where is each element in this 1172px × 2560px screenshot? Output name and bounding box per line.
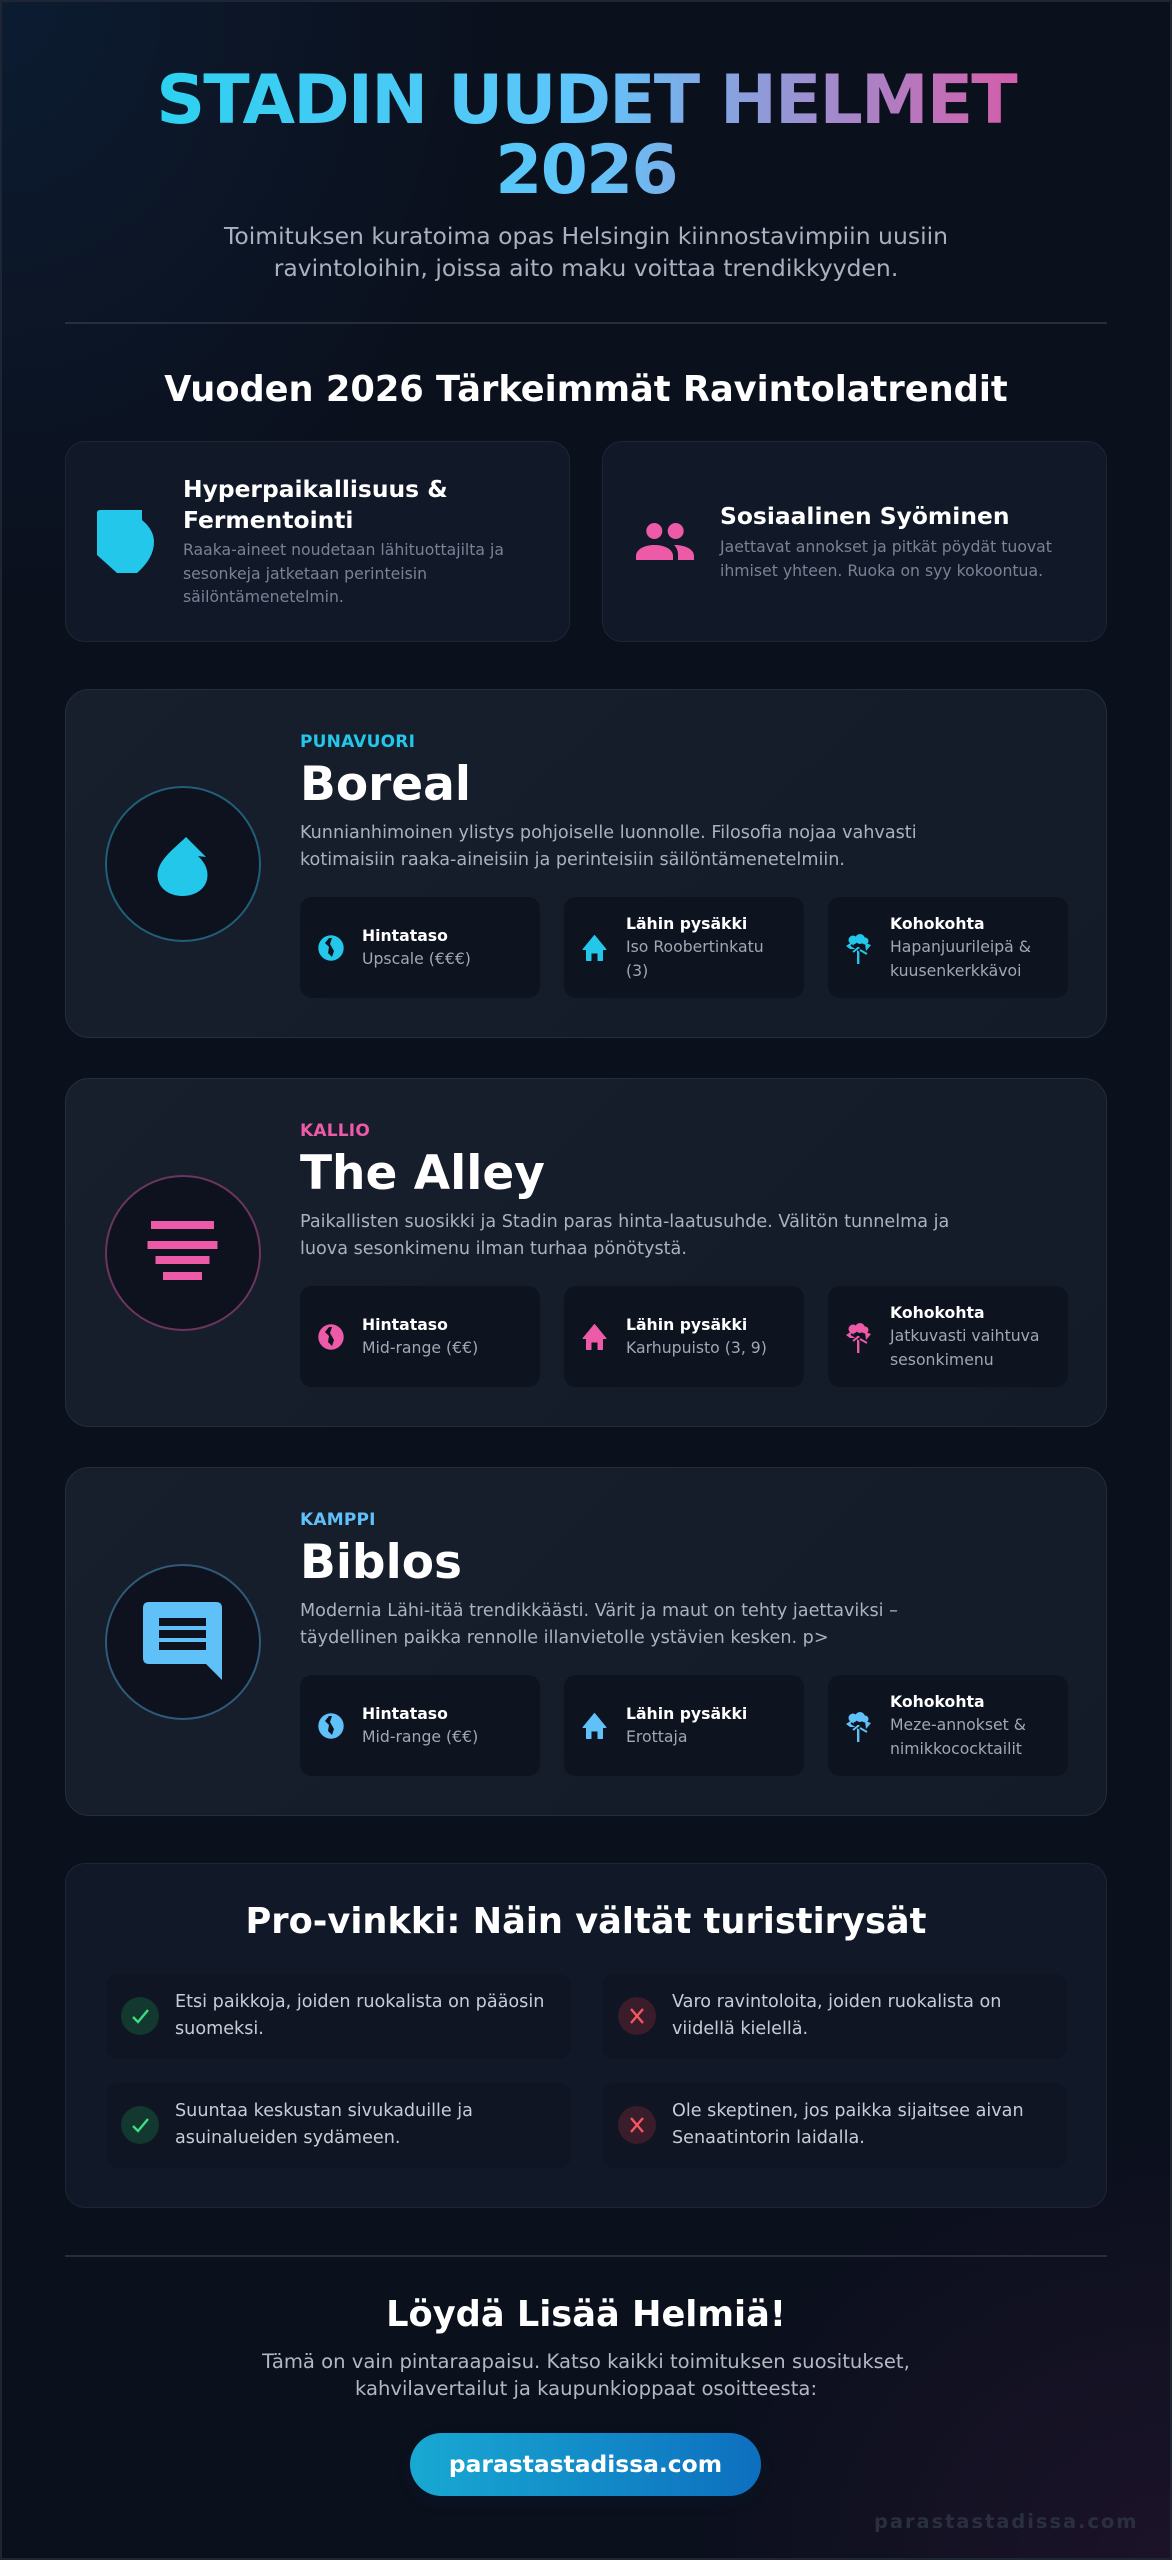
detail text: Jatkuvasti vaihtuva — [890, 1326, 1040, 1345]
icon: cross — [618, 1997, 656, 2035]
detail: highlight — [828, 897, 1068, 998]
footer heading: Löydä Lisää Helmiä! — [386, 2294, 786, 2335]
detail text — [626, 914, 764, 980]
detail text: Mid-range (€€) — [362, 1338, 478, 1357]
detail: price — [300, 897, 540, 998]
detail text — [626, 1704, 747, 1746]
trend description: sesonkeja jatketaan perinteisin — [183, 564, 427, 583]
restaurant description: Paikallisten suosikki ja Stadin paras hinta-laatusuhde. Välitön tunnelma ja — [300, 1212, 949, 1232]
icon: bars in ring — [105, 1175, 261, 1331]
tip text — [672, 1992, 1001, 2039]
panel: restaurant Biblos — [65, 1467, 1107, 1816]
restaurant description: kotimaisiin raaka-aineisiin ja perinteisiin säilöntämenetelmiin. — [300, 850, 845, 870]
subtitle: ravintoloihin, joissa aito maku voittaa trendikkyyden. — [274, 254, 898, 282]
detail: stop — [564, 1286, 804, 1387]
tip text: Etsi paikkoja, joiden ruokalista on pääosin — [175, 1992, 544, 2012]
icon: cross — [618, 2106, 656, 2144]
district label: KALLIO — [300, 1121, 370, 1141]
footer text — [262, 2350, 910, 2400]
restaurant description: luova sesonkimenu ilman turhaa pönötystä. — [300, 1239, 687, 1259]
trend title — [183, 475, 448, 534]
icon: price — [318, 1713, 344, 1739]
detail text: Lähin pysäkki — [626, 914, 747, 933]
title — [65, 66, 1107, 207]
panel: trend hyperlocal — [65, 441, 570, 642]
icon: tree — [846, 1712, 871, 1742]
watermark: parastastadissa.com — [874, 2510, 1138, 2533]
detail: highlight — [828, 1675, 1068, 1776]
section heading: trends: Vuoden 2026 Tärkeimmät Ravintolatrendit — [164, 369, 1008, 410]
detail text: Mid-range (€€) — [362, 1727, 478, 1746]
icon: house — [582, 935, 606, 961]
trend description: Raaka-aineet noudetaan lähituottajilta ja — [183, 540, 504, 559]
icon: check — [121, 2106, 159, 2144]
tip text: asuinalueiden sydämeen. — [175, 2128, 400, 2148]
restaurant description: Modernia Lähi-itää trendikkäästi. Värit ja maut on tehty jaettaviksi – — [300, 1601, 898, 1621]
tips heading: Pro-vinkki: Näin vältät turistirysät — [245, 1901, 926, 1942]
detail text: nimikkococktailit — [890, 1739, 1022, 1758]
tip text: Suuntaa keskustan sivukaduille ja — [175, 2101, 473, 2121]
panel: restaurant The Alley — [65, 1078, 1107, 1427]
icon: drop in ring — [105, 786, 261, 942]
trend title: Hyperpaikallisuus & — [183, 475, 448, 503]
call to action button — [410, 2433, 761, 2496]
detail text: Hintataso — [362, 1704, 448, 1723]
tip: do 1 — [106, 1974, 571, 2059]
title: 2026 — [495, 131, 677, 210]
detail text — [362, 926, 471, 968]
tip: do 2 — [106, 2083, 571, 2168]
tip text: Senaatintorin laidalla. — [672, 2128, 865, 2148]
detail: highlight — [828, 1286, 1068, 1387]
detail text: Erottaja — [626, 1727, 687, 1746]
detail text — [626, 1315, 767, 1357]
detail text: sesonkimenu — [890, 1350, 994, 1369]
restaurant name: Biblos — [300, 1534, 462, 1590]
icon: house — [582, 1324, 606, 1350]
detail text: Kohokohta — [890, 1303, 985, 1322]
tip text: Ole skeptinen, jos paikka sijaitsee aivan — [672, 2101, 1024, 2121]
detail text: Iso Roobertinkatu — [626, 937, 764, 956]
tip text — [175, 2101, 473, 2148]
tip: avoid 2 — [602, 2083, 1067, 2168]
icon: tree — [846, 934, 871, 964]
detail text: Lähin pysäkki — [626, 1315, 747, 1334]
icon: check — [121, 1997, 159, 2035]
detail text: (3) — [626, 961, 648, 980]
detail text: Hapanjuurileipä & — [890, 937, 1031, 956]
icon: house — [582, 1713, 606, 1739]
restaurant description — [300, 1601, 898, 1648]
restaurant description: Kunnianhimoinen ylistys pohjoiselle luonnolle. Filosofia nojaa vahvasti — [300, 823, 917, 843]
restaurant name: Boreal — [300, 756, 471, 812]
trend description — [183, 540, 504, 606]
detail: stop — [564, 897, 804, 998]
trend description: säilöntämenetelmin. — [183, 587, 344, 606]
icon: chat bubble in ring — [105, 1564, 261, 1720]
detail: price — [300, 1286, 540, 1387]
tip text: Varo ravintoloita, joiden ruokalista on — [672, 1992, 1001, 2012]
detail: price — [300, 1675, 540, 1776]
subtitle: Toimituksen kuratoima opas Helsingin kiinnostavimpiin uusiin — [224, 222, 948, 250]
footer text: kahvilavertailut ja kaupunkioppaat osoitteesta: — [355, 2377, 817, 2400]
restaurant name: The Alley — [300, 1146, 545, 1200]
detail text: Lähin pysäkki — [626, 1704, 747, 1723]
trend description: Jaettavat annokset ja pitkät pöydät tuovat — [720, 537, 1052, 556]
icon: tree — [846, 1323, 871, 1353]
detail text: Karhupuisto (3, 9) — [626, 1338, 767, 1357]
tip: avoid 1 — [602, 1974, 1067, 2059]
detail text — [890, 914, 1031, 980]
call to action button: parastastadissa.com — [449, 2450, 722, 2478]
detail text — [362, 1315, 478, 1357]
tip text: viidellä kielellä. — [672, 2019, 808, 2039]
detail text: kuusenkerkkävoi — [890, 961, 1022, 980]
trend title: Sosiaalinen Syöminen — [720, 502, 1010, 530]
detail text: Kohokohta — [890, 1692, 985, 1711]
detail text: Hintataso — [362, 926, 448, 945]
tip text — [175, 1992, 544, 2039]
detail text — [890, 1692, 1026, 1758]
detail text — [889, 1303, 1040, 1369]
restaurant description — [300, 1212, 949, 1259]
detail text — [362, 1704, 478, 1746]
trend description: ihmiset yhteen. Ruoka on syy kokoontua. — [720, 561, 1043, 580]
footer text: Tämä on vain pintaraapaisu. Katso kaikki toimituksen suositukset, — [262, 2350, 910, 2373]
panel: pro tips — [65, 1863, 1107, 2208]
detail text: Hintataso — [362, 1315, 448, 1334]
restaurant description: täydellinen paikka rennolle illanvietolle ystävien kesken. p> — [300, 1628, 829, 1648]
title: STADIN UUDET HELMET — [156, 61, 1016, 140]
district label: KAMPPI — [300, 1510, 376, 1530]
icon: price — [318, 935, 344, 961]
detail: stop — [564, 1675, 804, 1776]
trend title: Fermentointi — [183, 506, 353, 534]
panel: trend social dining — [602, 441, 1107, 642]
tip text — [672, 2101, 1024, 2148]
icon: price — [318, 1324, 344, 1350]
trend description — [719, 537, 1052, 580]
detail text: Kohokohta — [890, 914, 985, 933]
detail text: Meze-annokset & — [890, 1715, 1026, 1734]
icon: fermentation jar — [97, 510, 154, 573]
panel: restaurant Boreal — [65, 689, 1107, 1038]
tip text: suomeksi. — [175, 2019, 264, 2039]
restaurant description — [300, 823, 917, 870]
district label: PUNAVUORI — [300, 732, 415, 752]
subtitle — [224, 222, 948, 282]
icon: people — [636, 523, 694, 560]
detail text: Upscale (€€€) — [362, 949, 471, 968]
